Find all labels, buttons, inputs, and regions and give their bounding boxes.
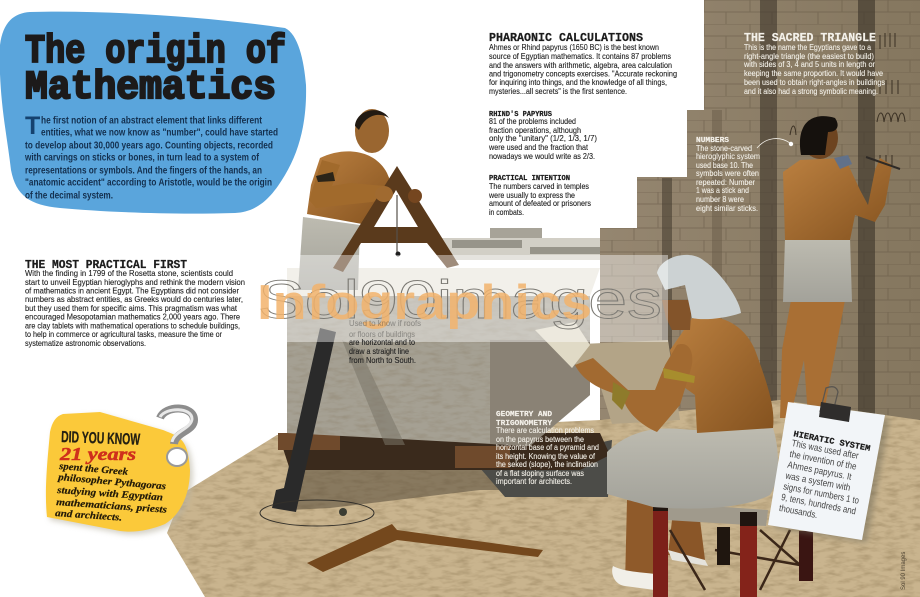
illustration: temple wall (600, 0, 920, 440)
text block: geometry and trigonometry: the seked (slope), the inclination (496, 459, 598, 469)
note text (777, 429, 871, 529)
callout text: and architects. (55, 508, 122, 524)
text block: the most practical first: THE MOST PRACTICAL FIRST (25, 259, 187, 272)
text block: geometry and trigonometry: GEOMETRY AND (496, 411, 553, 419)
note text: 9, tens, hundreds and (780, 492, 857, 517)
callout text: studying with Egyptian (56, 485, 164, 503)
text block: the sacred triangle (743, 32, 885, 96)
text block: geometry and trigonometry: TRIGONOMETRY (496, 420, 553, 428)
text block: level caption: from North to South. (349, 355, 416, 365)
text block: practical intention: The numbers carved in temples (489, 181, 589, 191)
text block: numbers (696, 137, 760, 213)
text block: the most practical first: of mathematics in ancient Egypt. The Egyptians did not consider (25, 286, 239, 296)
text block: the most practical first: to help in commerce or agricultural tasks, measure the time or (25, 329, 222, 339)
text block: the sacred triangle: right-angle triangle (the easiest to build) (744, 51, 874, 61)
callout text: mathematicians, priests (56, 497, 167, 516)
panel: intro blob (0, 12, 306, 214)
text block: rhind's papyrus: only the "unitary" (1/2, 1/3, 1/7) (489, 133, 597, 143)
text block: rhind's papyrus: fraction operations, although (489, 125, 581, 135)
text block: rhind's papyrus: 81 of the problems included (489, 116, 576, 126)
text block: practical intention: in combats. (489, 207, 524, 217)
text block: the most practical first: but they used them for specific aims. This pragmatism was what (25, 303, 238, 313)
text block: geometry and trigonometry: its height. Knowing the value of (496, 451, 595, 461)
text block: pharaonic calculations: PHARAONIC CALCULATIONS (489, 32, 643, 45)
text block: geometry and trigonometry: of a flat sloping surface was (496, 468, 584, 478)
note text: thousands. (778, 503, 818, 521)
text block: practical intention (488, 175, 591, 217)
text block: numbers: used base 10. The (696, 160, 753, 170)
text block: pharaonic calculations: and trigonometry concepts exercises. "Accurate reckoning (489, 68, 677, 78)
intro text: entities, what we now know as "number", could have started (41, 126, 278, 138)
text block: rhind's papyrus: were used and the fraction that (488, 142, 589, 152)
text block: practical intention: PRACTICAL INTENTION (489, 175, 570, 183)
illustration: man carving wall (780, 116, 900, 418)
callout: did you know (46, 408, 194, 535)
text block: the most practical first: systematize astronomic observations. (25, 338, 146, 348)
text block: geometry and trigonometry: There are calculation problems (496, 425, 594, 435)
text block: practical intention: were usually to express the (488, 190, 575, 200)
intro text: to develop about 30,000 years ago. Counting objects, recorded (25, 140, 273, 152)
text block: pharaonic calculations: and the answers with arithmetic, algebra, area calculation (489, 60, 672, 70)
intro text: with carvings on sticks or bones, in turn lead to a system of (24, 152, 259, 164)
note text: This was used after (791, 438, 860, 462)
text block: the most practical first: With the finding in 1799 of the Rosetta stone, scientists could (25, 268, 233, 278)
text block: geometry and trigonometry: horizontal base of a pyramid and (496, 442, 599, 452)
callout text (55, 429, 167, 524)
illustration: stone block (278, 268, 610, 470)
text block: pharaonic calculations: Ahmes or Rhind papyrus (1650 BC) is the best known (489, 42, 659, 52)
text block: rhind's papyrus (488, 111, 597, 161)
text block: practical intention: amount of defeated or prisoners (489, 198, 591, 208)
note text: signs for numbers 1 to (782, 481, 860, 507)
note text: was a system with (784, 470, 851, 494)
illustration: seated scribe (575, 255, 813, 597)
text block: level caption: are horizontal and to (349, 337, 415, 347)
text block: level caption: Used to know if roofs (349, 318, 421, 328)
text block: numbers: number 8 were (696, 194, 744, 204)
illustration: wooden set square (307, 524, 543, 572)
text block: the most practical first: are clay tablets with mathematical operations to schedule buildings, (25, 320, 240, 330)
intro text: T (25, 112, 40, 140)
text block: the sacred triangle: and it also had a strong symbolic meaning. (744, 86, 878, 96)
text block: geometry and trigonometry: important for architects. (496, 476, 572, 486)
title (25, 30, 286, 111)
photo credit: Sol 90 Images (901, 552, 907, 590)
icon: binder clip (819, 387, 851, 422)
text block: pharaonic calculations (489, 32, 677, 96)
title: Mathematics (25, 66, 276, 111)
intro text: of the decimal system. (25, 190, 113, 202)
text block: the sacred triangle: with sides of 3, 4 and 5 units in length or (743, 59, 875, 69)
illustration: background stone blocks (440, 228, 600, 260)
watermark band: Infographics (257, 276, 592, 330)
text block: rhind's papyrus: nowadays we would write as 2/3. (489, 151, 595, 161)
illustration: plumb post and wire (260, 328, 374, 526)
text block: the most practical first (25, 259, 245, 348)
intro text (24, 112, 278, 202)
text block: geometry and trigonometry: on the papyrus between the (496, 434, 584, 444)
text block: level caption (349, 318, 421, 365)
intro text: "anatomic accident" according to Aristotle, would be the origin (25, 176, 272, 188)
note text: HIERATIC SYSTEM (793, 429, 871, 454)
note text: Ahmes papyrus. It (786, 460, 853, 483)
text block: numbers: symbols were often (696, 168, 759, 178)
text block: the most practical first: encouraged Mesopotamian mathematics 2,000 years ago. There (25, 312, 240, 322)
text block: numbers: The stone-carved (696, 143, 752, 153)
callout text: spent the Greek (58, 461, 128, 478)
panel: hieratic system note (768, 387, 890, 543)
text block: numbers: hieroglyphic system (696, 151, 760, 161)
note text: the invention of the (789, 449, 857, 473)
callout leader: numbers (757, 139, 793, 148)
text block: the sacred triangle: THE SACRED TRIANGLE (744, 32, 876, 45)
callout text: DID YOU KNOW (61, 429, 141, 449)
intro text: he first notion of an abstract element that links different (41, 114, 262, 126)
text block: the most practical first: start to unveil Egyptian hieroglyphs and rethink the modern vision (25, 277, 245, 287)
text block: the sacred triangle: keeping the same proportion. It would have (744, 68, 883, 78)
text block: the most practical first: numbers as abstract entities, as Greeks would do centuries later, (25, 294, 243, 304)
callout text: philosopher Pythagoras (57, 472, 166, 492)
text block: numbers: 1 was a stick and (696, 185, 749, 195)
text block: numbers: NUMBERS (696, 137, 730, 145)
icon: question mark (160, 408, 194, 466)
text block: pharaonic calculations: source of Egyptian mathematics. It contains 87 problems (489, 51, 671, 61)
text block: level caption: or floors of buildings (349, 329, 415, 339)
text block: pharaonic calculations: mysteries...all secrets" is the first sentence. (489, 86, 627, 96)
text block: numbers: repeated: Number (696, 177, 755, 187)
illustration: papyrus (535, 322, 680, 424)
watermark band (257, 255, 668, 342)
illustration: ground (167, 400, 920, 597)
callout text: 21 years (59, 444, 136, 464)
title: The origin of (25, 30, 286, 75)
text block: geometry and trigonometry (496, 411, 599, 486)
text block: numbers: eight similar sticks. (696, 203, 758, 213)
text block: the sacred triangle: been used to obtain right-angles in buildings (744, 77, 885, 87)
text block: pharaonic calculations: for inquiring into things, and the knowledge of all things, (489, 77, 667, 87)
watermark band: Sol90images (258, 270, 662, 330)
text block: the sacred triangle: This is the name the Egyptians gave to a (744, 42, 871, 52)
text block: rhind's papyrus: RHIND'S PAPYRUS (489, 111, 552, 119)
illustration: man with A-frame level (298, 109, 459, 290)
intro text: representations or symbols. And the fingers of the hands, an (25, 164, 262, 176)
text block: level caption: draw a straight line (349, 346, 409, 356)
